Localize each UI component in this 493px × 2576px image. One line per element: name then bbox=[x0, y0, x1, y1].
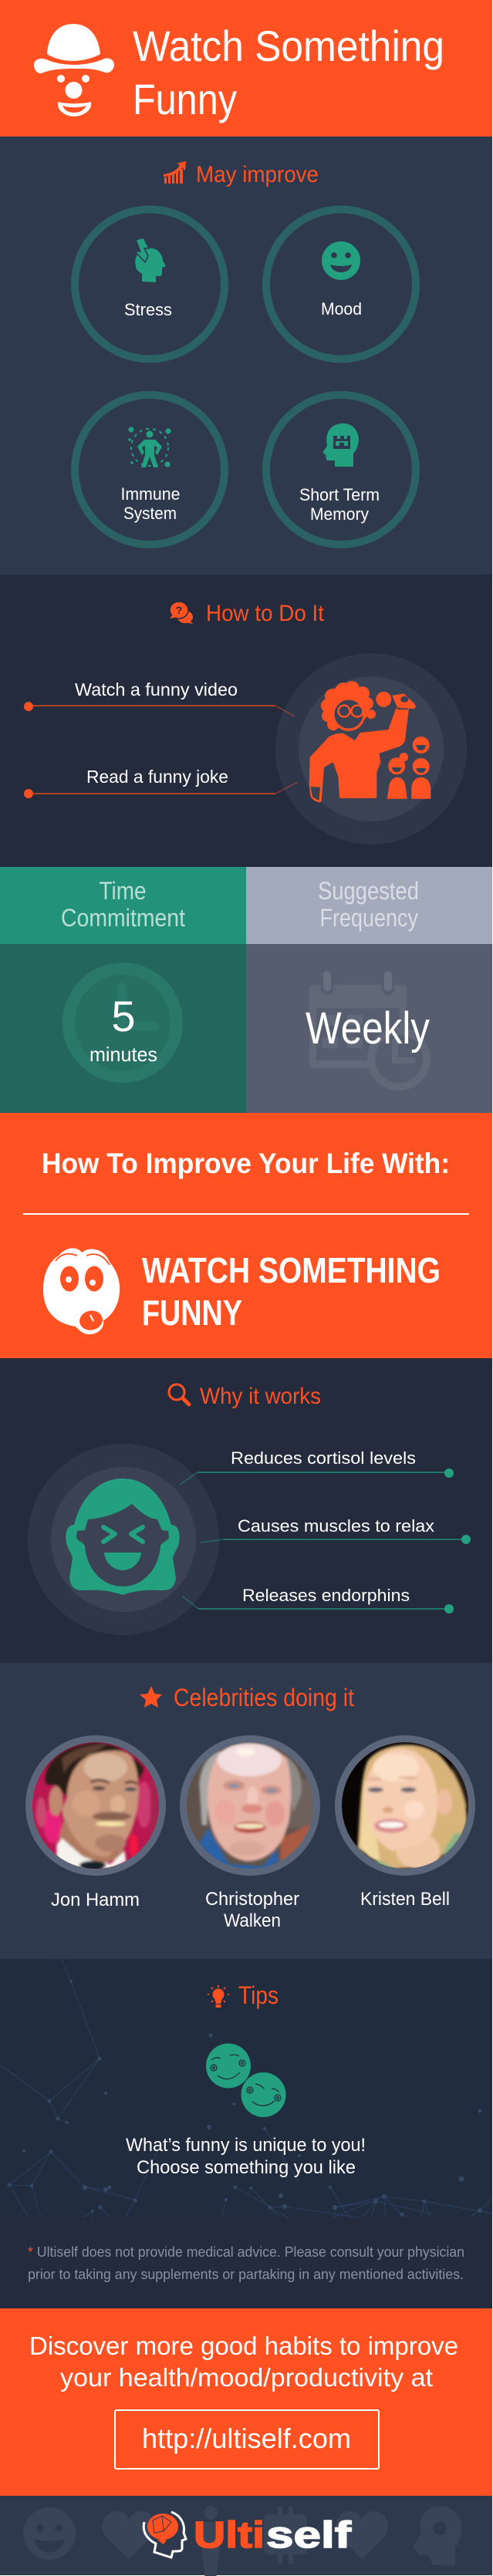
icon: immune person bbox=[128, 427, 171, 467]
title: Watch Something bbox=[133, 22, 444, 70]
heading: suggested frequency bbox=[318, 877, 419, 932]
text: discover more: your health/mood/productivity at bbox=[60, 2363, 433, 2392]
icon: tongue face bbox=[43, 1248, 120, 1334]
title bbox=[133, 22, 444, 123]
circle illustration: laughing woman bbox=[28, 1444, 219, 1635]
value: 5 minutes: minutes bbox=[89, 1043, 157, 1066]
heading: watch something funny bbox=[142, 1250, 441, 1333]
name: christopher walken: Christopher bbox=[205, 1889, 299, 1910]
icon: clown face bbox=[34, 24, 114, 116]
panel: tips bbox=[0, 1959, 492, 2308]
header banner bbox=[0, 0, 492, 137]
logo: ultiself: Ulti bbox=[194, 2515, 265, 2556]
callout: causes muscles to relax: Causes muscles to relax bbox=[238, 1516, 434, 1536]
value: 5 minutes bbox=[89, 992, 157, 1066]
constellation background bbox=[0, 1959, 492, 2221]
value: weekly: Weekly bbox=[306, 1003, 430, 1054]
text: funny tip: What’s funny is unique to you! bbox=[126, 2135, 366, 2156]
name: kristen bell: Kristen Bell bbox=[360, 1889, 450, 1910]
heading: why it works: Why it works bbox=[200, 1384, 321, 1409]
heading: celebrities doing it: Celebrities doing it bbox=[174, 1684, 354, 1711]
logo: ultiself: self bbox=[266, 2515, 352, 2556]
panel: call to action bbox=[0, 2308, 492, 2496]
item: mood: Mood bbox=[321, 299, 362, 319]
button: website link bbox=[115, 2410, 379, 2469]
panel: may improve bbox=[0, 137, 492, 575]
text: disclaimer bbox=[28, 2244, 464, 2282]
icon: clock backdrop bbox=[69, 969, 177, 1077]
callout: watch a funny video: Watch a funny video bbox=[75, 679, 238, 700]
heading: time commitment: Time bbox=[99, 877, 147, 905]
callout: watch a funny video bbox=[24, 679, 295, 716]
icon: memory head bbox=[322, 423, 359, 467]
item: immune system: Immune bbox=[120, 484, 181, 504]
portrait: jon hamm bbox=[25, 1735, 166, 1876]
icon: calendar backdrop bbox=[309, 975, 427, 1087]
text: discover more: Discover more good habits to improve bbox=[29, 2332, 458, 2360]
icon: laughing woman bbox=[66, 1479, 180, 1595]
panel: suggested frequency bbox=[246, 867, 492, 1113]
text: funny tip bbox=[126, 2135, 366, 2178]
icon: stressed head bbox=[135, 238, 166, 282]
panel: why it works bbox=[0, 1358, 492, 1663]
text: funny tip: Choose something you like bbox=[137, 2157, 356, 2178]
value: 5 minutes: 5 bbox=[111, 992, 136, 1040]
heading: time commitment: Commitment bbox=[61, 904, 185, 932]
callout: reduces cortisol levels: Reduces cortisol levels bbox=[231, 1448, 416, 1468]
item: short term memory: Short Term bbox=[299, 485, 380, 504]
callout: causes muscles to relax bbox=[200, 1516, 471, 1544]
item: immune system bbox=[75, 395, 225, 545]
name: christopher walken bbox=[205, 1889, 299, 1931]
callout: read a funny joke: Read a funny joke bbox=[86, 767, 228, 787]
portrait: christopher walken bbox=[180, 1735, 320, 1876]
icon: smiley bbox=[322, 241, 360, 280]
name: christopher walken: Walken bbox=[224, 1910, 281, 1931]
text: disclaimer: prior to taking any supplements or partaking in any mentioned activities. bbox=[28, 2267, 464, 2282]
decorative footer icons bbox=[23, 2506, 461, 2576]
panel: time commitment bbox=[0, 867, 246, 1113]
heading: how to improve: How To Improve Your Life With: bbox=[42, 1148, 450, 1179]
heading: how to do it: ? bbox=[176, 604, 182, 616]
panel: how to improve bbox=[0, 1113, 492, 1358]
circle illustration: comedian bbox=[275, 653, 467, 845]
item: mood bbox=[266, 210, 416, 359]
item: short term memory: Memory bbox=[310, 504, 369, 524]
item: stress bbox=[75, 210, 225, 359]
heading: suggested frequency: Suggested bbox=[318, 877, 419, 905]
icon: two dizzy smileys bbox=[206, 2044, 285, 2117]
heading: tips: Tips bbox=[238, 1981, 279, 2009]
heading: may improve: May improve bbox=[196, 162, 319, 187]
name: jon hamm: Jon Hamm bbox=[51, 1890, 140, 1910]
button: website link: http://ultiself.com bbox=[142, 2423, 351, 2454]
footer bbox=[0, 2496, 492, 2576]
icon: comedian with audience bbox=[309, 681, 431, 802]
callout: releases endorphins: Releases endorphins bbox=[242, 1586, 410, 1605]
heading: how to do it: How to Do It bbox=[206, 601, 325, 626]
item: stress: Stress bbox=[124, 300, 172, 319]
item: short term memory bbox=[266, 395, 416, 545]
callout: releases endorphins bbox=[182, 1586, 454, 1613]
panel: celebrities bbox=[0, 1663, 492, 1959]
text: disclaimer: * Ultiself does not provide medical advice. Please consult your physician bbox=[28, 2244, 464, 2260]
callout: read a funny joke bbox=[24, 767, 298, 798]
callout: reduces cortisol levels bbox=[180, 1448, 454, 1485]
text: discover more bbox=[29, 2332, 458, 2392]
panel: how to do it bbox=[0, 575, 492, 867]
heading: suggested frequency: Frequency bbox=[319, 904, 418, 932]
item: immune system: System bbox=[123, 504, 177, 523]
heading: time commitment bbox=[61, 877, 185, 932]
title: Funny bbox=[133, 75, 237, 123]
heading: watch something funny: WATCH SOMETHING bbox=[142, 1250, 441, 1290]
logo: ultiself bbox=[144, 2512, 352, 2557]
heading: tips bbox=[208, 1981, 279, 2009]
portrait: kristen bell bbox=[335, 1735, 475, 1876]
heading: watch something funny: FUNNY bbox=[142, 1293, 242, 1333]
